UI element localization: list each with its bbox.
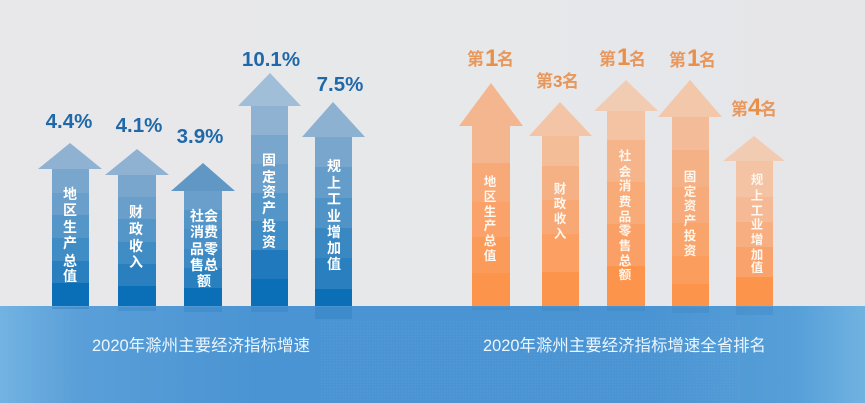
arrow: 固定资产投资 第1名: 投 [684, 229, 697, 243]
arrow: 规上工业增加值 第4名: 增 [751, 232, 763, 247]
arrow: 规上工业增加值 7.5%: 增 [327, 224, 341, 240]
arrow: 规上工业增加值 第4名: 加 [751, 248, 763, 262]
arrow: 地区生产总值 第1名: 名 [497, 50, 514, 69]
arrow: 地区生产总值 第1名: 产 [484, 218, 496, 233]
arrow: 固定资产投资 第1名: 资 [684, 244, 696, 258]
arrow: 规上工业增加值 第4名: 值 [751, 260, 764, 275]
arrow: 地区生产总值 4.4%: 4.4% [46, 110, 92, 133]
arrow: 规上工业增加值 7.5%: 上 [327, 175, 341, 191]
arrow: 地区生产总值 4.4%: 值 [63, 268, 77, 284]
arrow: 社会消费品零售总额 第1名: 费 [619, 194, 632, 209]
arrow: 社会消费品零售总额 第1名: 消 [619, 178, 631, 193]
arrow: 规上工业增加值 7.5%: 加 [327, 240, 341, 256]
arrow: 规上工业增加值 第4名: 业 [751, 218, 763, 232]
arrow: 财政收入 4.1%: 4.1% [116, 114, 162, 137]
arrow: 规上工业增加值 第4名: 规 [751, 173, 764, 187]
arrow: 规上工业增加值 第4名: 工 [751, 204, 763, 218]
arrow: 社会消费品零售总额 第1名: 零 [619, 224, 632, 238]
arrow: 固定资产投资 10.1%: 产 [262, 200, 276, 216]
arrow: 财政收入 4.1%: 财 [129, 204, 143, 220]
arrow: 财政收入 第3名: 财 [554, 182, 566, 196]
arrow: 固定资产投资 10.1%: 10.1% [242, 48, 300, 71]
arrow: 固定资产投资 10.1%: 资 [262, 184, 276, 200]
arrow: 地区生产总值 4.4%: 地 [63, 186, 77, 202]
caption: left chart: 2020年滁州主要经济指标增速 [92, 336, 310, 355]
arrow: 社会消费品零售总额 3.9% [171, 125, 235, 307]
arrow: 固定资产投资 第1名: 1 [687, 45, 700, 72]
arrow: 固定资产投资 第1名: 名 [699, 51, 716, 70]
arrow: 固定资产投资 第1名: 资 [684, 199, 696, 213]
arrow: 地区生产总值 第1名: 生 [484, 204, 496, 219]
arrow: 社会消费品零售总额 3.9%: 品 [190, 241, 204, 257]
arrow: 财政收入 第3名: 3 [553, 72, 562, 91]
arrow: 社会消费品零售总额 3.9%: 零 [204, 241, 218, 257]
arrow: 固定资产投资 第1名: 第 [669, 50, 686, 70]
arrow: 规上工业增加值 7.5% [302, 73, 365, 307]
arrow: 地区生产总值 4.4%: 产 [63, 235, 77, 251]
arrow: 地区生产总值 第1名: 第 [467, 49, 484, 69]
arrow: 固定资产投资 第1名: 产 [684, 213, 696, 228]
arrow: 社会消费品零售总额 第1名: 第 [599, 49, 616, 69]
arrow: 规上工业增加值 第4名: 上 [751, 189, 763, 203]
arrow: 规上工业增加值 第4名: 4 [748, 94, 762, 121]
arrow: 社会消费品零售总额 3.9%: 社 [190, 208, 204, 224]
chart: provincial rankings (orange arrows) [459, 44, 785, 307]
bottom band with captions [0, 306, 865, 403]
arrow: 社会消费品零售总额 3.9%: 额 [197, 273, 211, 289]
arrow: 财政收入 4.1%: 政 [129, 221, 143, 237]
arrow: 财政收入 4.1%: 收 [129, 238, 143, 254]
arrow: 社会消费品零售总额 第1名: 会 [619, 164, 632, 179]
arrow: 规上工业增加值 第4名: 第 [731, 99, 748, 119]
arrow: 规上工业增加值 第4名: 名 [760, 100, 777, 119]
arrow: 固定资产投资 第1名: 定 [684, 184, 697, 199]
arrow: 地区生产总值 第1名: 地 [484, 174, 497, 189]
arrow: 地区生产总值 第1名: 总 [484, 233, 497, 248]
arrow: 社会消费品零售总额 第1名 [594, 44, 658, 307]
arrow: 社会消费品零售总额 第1名: 社 [619, 148, 632, 163]
arrow: 固定资产投资 10.1%: 投 [262, 218, 276, 234]
arrow: 地区生产总值 4.4% [38, 110, 102, 307]
arrow: 规上工业增加值 第4名 [723, 94, 785, 307]
arrow: 财政收入 第3名: 入 [554, 227, 567, 241]
arrow: 规上工业增加值 7.5%: 7.5% [317, 73, 363, 96]
arrow: 财政收入 第3名: 名 [562, 72, 579, 91]
arrow: 社会消费品零售总额 第1名: 额 [619, 267, 632, 282]
chart: growth rates (blue arrows) [38, 48, 365, 307]
arrow: 规上工业增加值 7.5%: 工 [327, 191, 341, 207]
arrow: 财政收入 第3名 [529, 71, 592, 307]
arrow: 固定资产投资 10.1%: 固 [262, 152, 276, 168]
arrow: 社会消费品零售总额 第1名: 品 [619, 210, 631, 224]
arrow: 社会消费品零售总额 3.9%: 售 [190, 257, 204, 273]
arrow: 规上工业增加值 7.5%: 值 [327, 256, 341, 272]
arrow: 规上工业增加值 7.5%: 业 [327, 208, 341, 224]
arrow: 地区生产总值 4.4%: 区 [63, 202, 77, 218]
arrow: 固定资产投资 10.1%: 定 [262, 169, 276, 185]
arrow: 社会消费品零售总额 第1名: 售 [619, 238, 631, 253]
caption: right chart: 2020年滁州主要经济指标增速全省排名 [483, 336, 766, 355]
arrow: 固定资产投资 第1名 [658, 45, 722, 307]
arrow: 财政收入 第3名: 政 [554, 196, 567, 211]
arrow: 社会消费品零售总额 3.9%: 会 [204, 208, 218, 224]
arrow: 社会消费品零售总额 第1名: 名 [629, 50, 646, 69]
arrow: 地区生产总值 第1名 [459, 45, 523, 307]
arrow: 财政收入 4.1% [105, 114, 169, 307]
arrow: 地区生产总值 第1名: 1 [485, 45, 498, 72]
arrow: 地区生产总值 4.4%: 总 [63, 253, 77, 269]
arrow: 固定资产投资 10.1%: 资 [262, 234, 276, 250]
arrow: 地区生产总值 第1名: 值 [484, 248, 497, 263]
arrow: 固定资产投资 第1名: 固 [684, 170, 696, 184]
arrow: 地区生产总值 第1名: 区 [484, 190, 496, 204]
arrow: 社会消费品零售总额 3.9%: 费 [204, 224, 218, 240]
arrow: 社会消费品零售总额 3.9%: 3.9% [177, 125, 223, 148]
arrow: 社会消费品零售总额 3.9%: 消 [190, 224, 204, 240]
arrow: 社会消费品零售总额 第1名: 总 [619, 253, 632, 268]
arrow: 财政收入 第3名: 第 [536, 71, 553, 91]
arrow: 地区生产总值 4.4%: 生 [63, 219, 77, 235]
arrow: 财政收入 4.1%: 入 [129, 254, 143, 270]
arrow: 固定资产投资 10.1% [238, 48, 301, 307]
arrow: 财政收入 第3名: 收 [554, 211, 567, 226]
arrow: 规上工业增加值 7.5%: 规 [327, 158, 341, 174]
arrow: 社会消费品零售总额 第1名: 1 [617, 44, 630, 71]
arrow: 社会消费品零售总额 3.9%: 总 [204, 257, 218, 273]
